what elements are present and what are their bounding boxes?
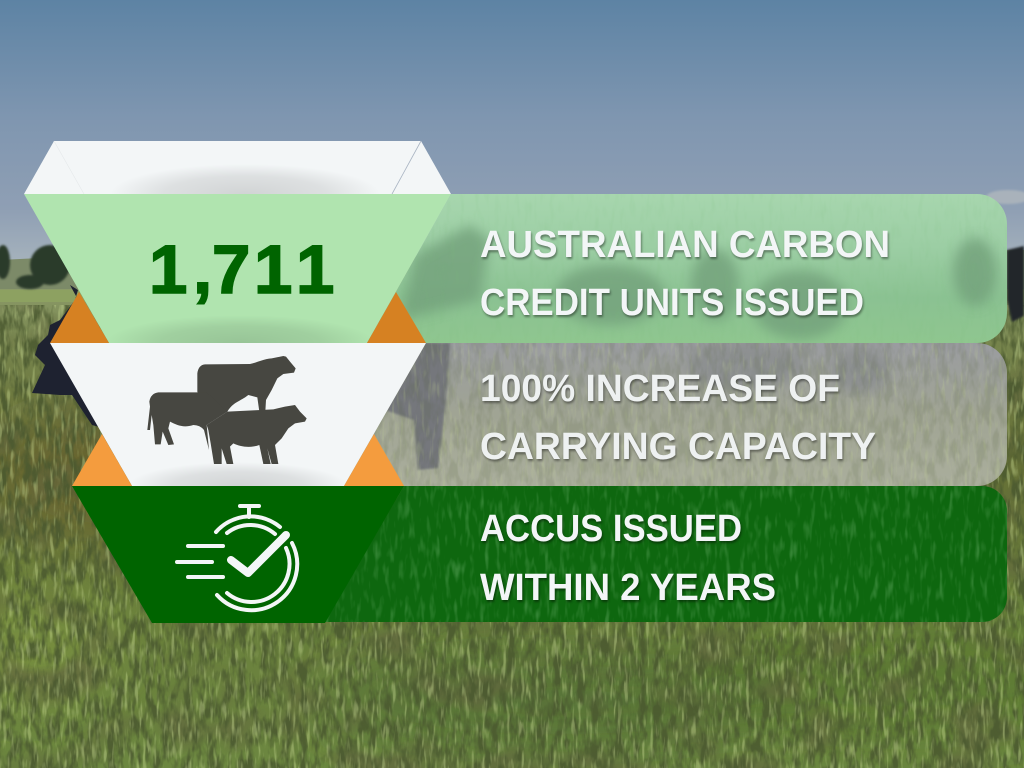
orange fold left <box>50 292 109 343</box>
trees on horizon <box>0 245 70 289</box>
text: accus issued <box>480 508 776 609</box>
text: carbon credit units <box>480 224 890 324</box>
icon: three cattle <box>147 356 307 464</box>
icon: stopwatch with check <box>177 506 297 610</box>
faded cow legs in band <box>385 343 450 470</box>
light green funnel segment <box>24 194 451 343</box>
text: carbon credit units: AUSTRALIAN CARBON <box>480 224 890 266</box>
text: accus issued: ACCUS ISSUED <box>480 508 742 550</box>
text: accus issued: WITHIN 2 YEARS <box>480 567 776 609</box>
white funnel segment <box>50 343 426 486</box>
text: carrying capacity: CARRYING CAPACITY <box>480 426 876 468</box>
panel: two-year band <box>320 486 1010 623</box>
text: carbon credit units: CREDIT UNITS ISSUED <box>480 282 864 324</box>
white funnel cap <box>24 140 451 194</box>
big number: 1,711 <box>149 231 334 308</box>
faded cattle herd in band <box>400 225 997 339</box>
panel: carrying capacity band <box>340 341 1010 486</box>
light orange fold right <box>344 434 404 486</box>
light orange fold left <box>72 434 132 486</box>
pasture colour patches <box>0 420 1024 750</box>
text: carrying capacity <box>480 368 876 468</box>
text: carrying capacity: 100% INCREASE OF <box>480 368 840 410</box>
orange fold right <box>367 292 426 343</box>
cow at right edge <box>1007 246 1024 322</box>
dark green funnel segment <box>72 486 404 623</box>
farmer silhouette <box>32 285 110 430</box>
panel: carbon credits band <box>340 194 1010 343</box>
